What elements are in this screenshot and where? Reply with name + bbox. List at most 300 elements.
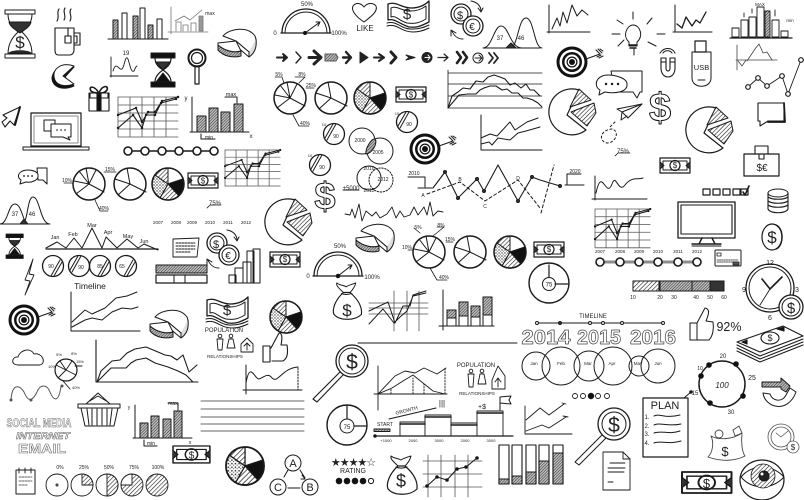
- bar chart with min max lower: max: [168, 401, 178, 407]
- bar chart with max and min: y: [184, 96, 188, 102]
- curve chart with axis: [243, 365, 302, 394]
- pie chart labeled top: 25%: [306, 83, 317, 89]
- icon: clock with coin: $: [787, 300, 796, 317]
- dial with 75 lower: [327, 405, 367, 445]
- large line chart: [96, 340, 198, 382]
- bars chart centre: [439, 290, 494, 330]
- note card: [173, 238, 199, 257]
- small ratio pie second: 90: [406, 122, 412, 128]
- plan sheet: 4.: [644, 441, 650, 447]
- years in outline: 2016: [630, 327, 676, 349]
- pie chart plain: [315, 82, 347, 114]
- pie chart shaded: [354, 82, 386, 114]
- years in outline: [522, 327, 676, 349]
- coins second: €: [225, 251, 231, 262]
- timeline heading and line: TIMELINE: [579, 314, 607, 320]
- venn months: Apr: [608, 361, 616, 366]
- years in outline: 2014: [522, 327, 571, 349]
- growth steps chart: 2000: [461, 438, 470, 443]
- small area chart: [736, 44, 777, 70]
- dial with 75 lower: 75: [344, 425, 351, 431]
- pie chart labeled centre: 15%: [445, 237, 456, 243]
- A B C cycle: B: [306, 482, 314, 494]
- A B C cycle: A: [289, 458, 297, 470]
- population icons lower: [457, 363, 505, 396]
- timeline rings right: [595, 249, 703, 266]
- timeline of rings: [124, 147, 218, 155]
- icon: thumb up left: [263, 333, 288, 362]
- ring with values: 20: [720, 354, 727, 360]
- icon: paper plane: [601, 104, 642, 143]
- outline title words: [6, 416, 72, 456]
- simple grid line chart: [423, 455, 482, 497]
- pie chart labeled top: 5%: [275, 72, 283, 78]
- icon: briefcase: [744, 146, 779, 176]
- year labels with percent: 2010: [205, 220, 216, 225]
- heartbeat wave: [345, 202, 443, 221]
- zigzag and dashed lines chart: D: [516, 176, 520, 182]
- icon: shopping basket: [78, 393, 120, 426]
- venn months: Jun: [654, 361, 662, 366]
- bill second row: [188, 173, 218, 188]
- icon: idea bulb with rays: [612, 12, 665, 55]
- stacked progress bars: [156, 265, 207, 283]
- venn diagram: 2005: [372, 150, 384, 156]
- magnifier with dollar: [313, 345, 368, 402]
- plan sheet: PLAN: [651, 400, 679, 412]
- icon: usb stick: [692, 41, 711, 86]
- curve chart right: [592, 176, 647, 200]
- ring with values: 10: [697, 366, 703, 372]
- grid chart upper: [225, 150, 280, 186]
- rating stars and dots: RATING: [340, 468, 366, 475]
- pie chart labeled second row: 15%: [105, 167, 116, 173]
- bar chart with max and min: max: [226, 92, 236, 98]
- small ratio pie second: 10: [395, 111, 400, 116]
- coins second: $: [213, 239, 219, 251]
- population icons: RELATIONSHIPS: [207, 354, 243, 359]
- mountain chart with months: Jun: [140, 239, 148, 245]
- bar chart with min max lower: [128, 401, 192, 447]
- ring with values: 25: [748, 375, 756, 382]
- icon: clock with coin: 6: [768, 315, 772, 322]
- ring with values: 100: [715, 381, 729, 390]
- small labeled pie: 8%: [71, 351, 77, 356]
- A B C cycle: C: [274, 482, 282, 494]
- year labels with percent: 2011: [223, 220, 233, 225]
- money bag: [333, 283, 362, 320]
- small bar and arrow chart: max: [205, 11, 215, 17]
- outline title words: EMAIL: [18, 441, 66, 456]
- dollar flag second: [206, 297, 248, 328]
- small curve chart: [110, 51, 138, 77]
- icon: laptop with chat: [23, 113, 89, 150]
- shaded pie lower: [226, 447, 264, 485]
- icon: briefcase: $€: [756, 163, 768, 174]
- icon: speech bubble: [758, 103, 785, 126]
- pie chart plain second row: [114, 168, 146, 200]
- graded hatch bar: 40: [693, 295, 699, 301]
- growth steps chart: 3000: [487, 438, 496, 443]
- clock small with coin: [768, 424, 799, 453]
- money bag lower: [387, 456, 417, 494]
- icon: coin dollar: [762, 224, 782, 250]
- population icons: [205, 328, 253, 359]
- row of ratio pies: 90: [78, 265, 84, 271]
- growth steps chart: |||: [439, 399, 445, 408]
- large dollar: $: [314, 176, 336, 218]
- icon: tea mug: [55, 8, 80, 55]
- target with arrow: [410, 134, 456, 164]
- progress pies row: 100%: [152, 465, 165, 471]
- money bag lower: $: [396, 471, 406, 491]
- venn months: Jan: [530, 361, 538, 366]
- plan sheet: 2.: [644, 424, 650, 430]
- icon: magnet: [660, 48, 675, 77]
- pie chart labeled top: 40%: [300, 121, 311, 127]
- bar chart with arrows: [730, 2, 794, 38]
- line with ring points: [746, 58, 803, 96]
- year labels with percent: [153, 201, 252, 225]
- growth steps chart: +$: [478, 404, 486, 411]
- rating stars and dots: ★★★★☆: [331, 457, 376, 469]
- icon: black hourglass: [151, 53, 175, 87]
- dollar flag second: $: [223, 302, 232, 319]
- population icons: POPULATION: [205, 328, 243, 334]
- notepad: [16, 468, 35, 494]
- line chart on grid: [118, 97, 178, 137]
- bell curves: 37: [497, 36, 504, 42]
- curved arrow: [762, 378, 796, 406]
- mountain chart with months: Apr: [104, 230, 112, 236]
- bill second row: $: [201, 176, 206, 186]
- dial with 75: [529, 263, 569, 303]
- graded hatch bar: 20: [657, 295, 663, 301]
- pie chart plain centre: [454, 236, 486, 268]
- bell curves: 46: [518, 36, 525, 42]
- small bar and arrow chart: [168, 7, 215, 34]
- icon: cloud: [13, 350, 43, 365]
- gauge second: 100%: [364, 275, 380, 281]
- bar chart with min max lower: x: [189, 440, 192, 446]
- 3D pie chart: [218, 29, 256, 57]
- bar chart with arrows: min: [786, 18, 794, 23]
- graded hatch bar: 50: [707, 295, 713, 301]
- pie chart shaded second row: [152, 168, 184, 200]
- plan sheet: 1.: [644, 415, 650, 421]
- icon: dollar flag bill: $: [403, 6, 412, 23]
- line chart wide: [448, 70, 542, 108]
- exploded pie right: [686, 107, 733, 153]
- venn months: May: [634, 361, 643, 366]
- icon: clock with coin: 12: [766, 260, 774, 267]
- exploded pie chart: [549, 89, 596, 135]
- icon: clock with coin: [742, 260, 803, 322]
- icon: thumb up and percent: 92%: [716, 320, 742, 334]
- outline title words: SOCIAL MEDIA: [6, 416, 72, 430]
- icon: dollar and euro coins: [451, 1, 483, 39]
- timeline rings right: 2010: [653, 249, 664, 254]
- zigzag and dashed lines chart: A: [421, 193, 425, 199]
- bell curves small: 37: [12, 212, 19, 218]
- timeline rings right: 2011: [673, 249, 683, 254]
- magnifier with dollar: $: [346, 351, 358, 374]
- year labels with percent: 2008: [171, 220, 182, 225]
- plan sheet: [643, 391, 692, 457]
- gauge: [273, 2, 347, 37]
- line chart second: [481, 115, 542, 150]
- mountain chart with months: Feb: [68, 232, 78, 238]
- icon: bill: [396, 87, 426, 102]
- bar chart with max and min: [184, 92, 252, 141]
- venn diagram: 2010: [363, 166, 375, 172]
- bill lower right: [682, 472, 732, 493]
- area chart with dashed drops: [374, 366, 447, 410]
- timeline heading and line: [536, 314, 664, 324]
- icon: dollar and euro coins: €: [469, 22, 475, 33]
- small curve chart: 19: [123, 51, 130, 57]
- icon: hourglass with dollar: $: [15, 33, 25, 52]
- bar chart with arrows: MAX: [755, 2, 765, 7]
- checkbox row: [703, 186, 749, 195]
- icon: dollar flag bill: [387, 1, 429, 32]
- magnifier with dollar right: $: [608, 414, 620, 437]
- icon: magnifier: [188, 50, 206, 84]
- document: [603, 452, 630, 490]
- gauge second: 50%: [334, 244, 347, 250]
- pie chart labeled second row: [62, 167, 116, 212]
- zigzag and dashed lines chart: B: [458, 177, 462, 183]
- icon: coin stack: [768, 189, 788, 213]
- bar chart with min max lower: y: [128, 405, 131, 411]
- icon: coin dollar: $: [767, 228, 777, 247]
- bill centre left: [270, 252, 300, 267]
- pie chart labeled centre: 8%: [437, 223, 445, 229]
- icon: dollar and euro coins: $: [457, 10, 463, 22]
- mountain chart with months: [46, 223, 158, 250]
- row of ratio pies: 65: [119, 264, 125, 270]
- stair bars: [229, 249, 260, 283]
- year labels with percent: 2007: [153, 220, 164, 225]
- graded hatch bar: [630, 281, 727, 301]
- target second: [556, 46, 603, 78]
- population icons lower: RELATIONSHIPS: [459, 391, 495, 396]
- ruled lines: [201, 401, 304, 431]
- graded hatch bar: 60: [721, 295, 727, 301]
- venn months: Feb: [557, 361, 565, 366]
- plan sheet: 3.: [644, 432, 650, 438]
- 3D pie centre: [356, 224, 394, 252]
- target third: [8, 304, 55, 336]
- pie chart labeled second row: 10%: [62, 178, 73, 184]
- coins second: [207, 230, 239, 268]
- row of ratio pies: 90: [48, 264, 54, 270]
- dots row: [572, 393, 610, 399]
- pie chart labeled second row: 40%: [99, 206, 110, 212]
- icon: eye: [740, 460, 784, 500]
- venn diagram: 2012: [377, 177, 389, 183]
- small labeled pie: 40%: [72, 385, 80, 390]
- grid chart centre: [369, 291, 428, 331]
- small ratio pie second: [395, 111, 418, 132]
- row of arrows: [277, 51, 498, 64]
- progress pies row: 50%: [104, 465, 115, 471]
- gauge: 50%: [301, 2, 314, 8]
- small labeled pie: [48, 351, 84, 390]
- small ratio pie third: 10: [308, 153, 313, 158]
- shaded pie lower left of centre: [270, 301, 302, 333]
- icon: credit card: [715, 250, 741, 266]
- bar chart with max and min: x: [250, 134, 252, 140]
- progress pies row: 0%: [56, 465, 64, 471]
- timeline rings right: 2008: [615, 249, 626, 254]
- pie chart labeled top: [274, 72, 317, 127]
- bar chart with max and min: min: [205, 135, 213, 141]
- grid chart right: [595, 209, 650, 248]
- gauge second: 0: [306, 274, 310, 280]
- icon: gift: [89, 87, 109, 111]
- long divider: [358, 342, 517, 344]
- progress pies row: [46, 465, 168, 496]
- venn diagram: 2015: [363, 188, 375, 194]
- icon: money stack: [737, 326, 803, 362]
- bell curves small: 46: [29, 212, 36, 218]
- ring with values: [692, 354, 756, 416]
- growth steps chart: 2000: [409, 438, 418, 443]
- timeline rings right: 2007: [595, 249, 606, 254]
- clock small with coin: $: [791, 443, 796, 452]
- wave line: [10, 385, 63, 401]
- bar chart with min max lower: min: [147, 441, 155, 447]
- pie chart labeled centre: 40%: [439, 275, 450, 281]
- bill lower left: [173, 446, 210, 463]
- gauge: 0: [273, 31, 277, 37]
- venn diagram: 2000: [354, 138, 366, 144]
- icon: clock with coin: 9: [742, 287, 746, 294]
- venn months: [522, 347, 675, 385]
- small ratio pie third: [308, 153, 330, 176]
- pie chart labeled top: 8%: [298, 72, 306, 78]
- flag year 2010 note: 2010: [408, 171, 420, 177]
- icon: dollar sign: $: [649, 86, 671, 130]
- outline title words: INTERNET: [16, 431, 72, 441]
- icon: cursor arrow: [2, 107, 20, 127]
- growth steps chart: GROWTH: [395, 405, 419, 417]
- growth steps chart: +1000: [380, 438, 392, 443]
- year labels with percent: 75%: [209, 201, 222, 207]
- mountain chart with months: May: [123, 234, 133, 240]
- zigzag axis chart: [673, 5, 712, 32]
- growth steps chart: [374, 396, 513, 443]
- progress columns: [499, 445, 563, 484]
- bill lower left: $: [189, 450, 195, 462]
- icon: heart with like: LIKE: [356, 24, 374, 33]
- dial with 75: 75: [546, 282, 553, 288]
- percent note: [615, 149, 630, 156]
- percent note: 75%: [617, 149, 630, 155]
- line chart mid left: [71, 292, 140, 331]
- icon: lightning: [25, 259, 34, 295]
- bill lower right: $: [703, 476, 711, 491]
- ring with values: 30: [728, 410, 735, 416]
- graded hatch bar: 10: [630, 295, 636, 301]
- year labels with percent: 2009: [187, 220, 198, 225]
- magnifier with dollar right: [575, 408, 630, 465]
- icon: hourglass with dollar: [5, 10, 35, 58]
- gauge second: [306, 244, 380, 281]
- mountain chart with months: Jan: [51, 235, 59, 241]
- timeline rings right: 2012: [692, 249, 703, 254]
- growth steps chart: START: [377, 422, 393, 428]
- timeline caption: Timeline: [74, 281, 106, 291]
- pie chart labeled centre: 10%: [402, 245, 413, 251]
- bell curves: [483, 18, 542, 48]
- spike line chart: [547, 5, 590, 33]
- small ratio pie: 10: [322, 122, 327, 127]
- bill top right: [660, 158, 690, 173]
- population icons lower: POPULATION: [457, 363, 495, 369]
- bell curves small: [0, 197, 50, 224]
- bill top right: $: [673, 161, 678, 170]
- icon: usb stick: USB: [694, 63, 709, 72]
- row of ratio pies: 85: [97, 264, 103, 270]
- small labeled pie: 15%: [76, 359, 84, 364]
- icon: monitor: [678, 202, 735, 246]
- bill centre left: $: [283, 255, 288, 264]
- mountain chart with months: Mar: [87, 223, 97, 229]
- icon: chat bubbles: [596, 71, 642, 98]
- gauge: 100%: [331, 31, 347, 37]
- icon: thumb up and percent: [690, 308, 742, 340]
- small ratio pie: 90: [333, 134, 339, 140]
- exploded pie centre: [265, 199, 312, 245]
- open money bag: [708, 426, 745, 460]
- pie chart shaded centre: [494, 236, 526, 268]
- progress pies row: 25%: [79, 465, 90, 471]
- icon: heart with like: [352, 3, 376, 33]
- row of ratio pies: [42, 256, 136, 276]
- year labels with percent: 2012: [241, 220, 252, 225]
- 3D pie second: [150, 310, 188, 338]
- A B C cycle: [270, 455, 318, 495]
- venn diagram: [343, 128, 393, 194]
- bar chart top: [108, 8, 168, 39]
- icon: pacman pie: [52, 65, 74, 88]
- small labeled pie: 5%: [56, 352, 62, 357]
- pie chart labeled centre: [402, 223, 456, 281]
- rating stars and dots: [331, 457, 376, 484]
- icon: clock with coin: 3: [795, 287, 799, 294]
- graded hatch bar: 30: [671, 295, 677, 301]
- progress pies row: 75%: [129, 465, 140, 471]
- ring with values: 15: [692, 391, 699, 397]
- timeline rings right: 2009: [634, 249, 645, 254]
- growth steps chart: 3000: [435, 438, 444, 443]
- hourglass small: [6, 234, 23, 258]
- venn diagram: +5000: [343, 186, 360, 192]
- years in outline: 2015: [577, 327, 621, 349]
- zigzag and dashed lines chart: [421, 165, 584, 213]
- bill centre right: $: [547, 245, 552, 254]
- pie chart labeled centre: 5%: [414, 225, 422, 231]
- small ratio pie third: 90: [319, 165, 325, 171]
- bill centre right: [534, 242, 564, 257]
- venn months: Mar: [584, 361, 592, 366]
- small ratio pie: [322, 122, 344, 144]
- money bag: $: [342, 301, 352, 320]
- zigzag and dashed lines chart: C: [483, 204, 487, 210]
- flag year 2010 note: [408, 171, 432, 188]
